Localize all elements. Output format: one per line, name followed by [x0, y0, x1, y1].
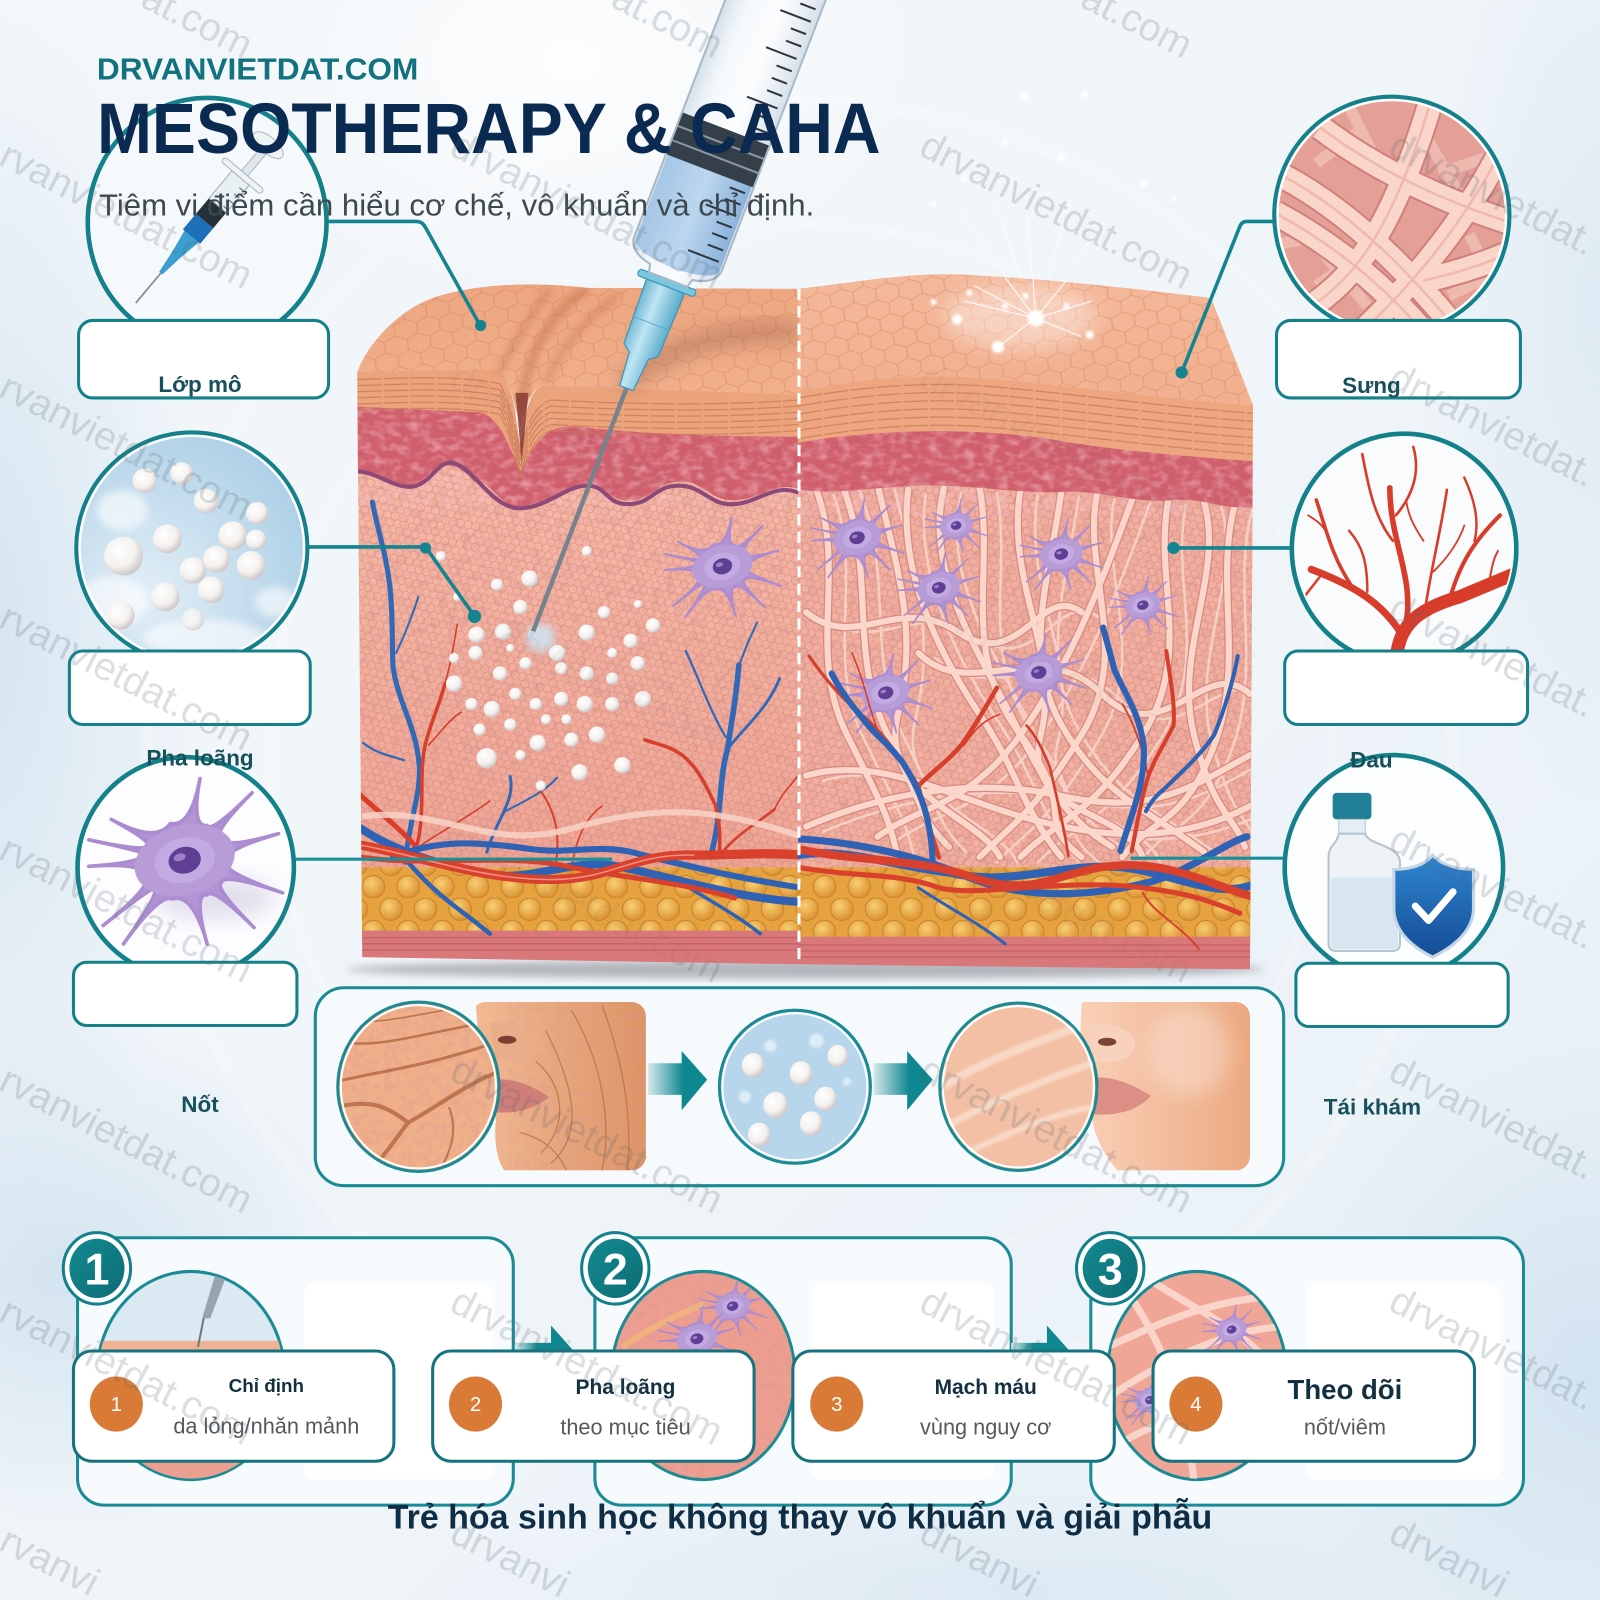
icon: collagen fibres — [1274, 97, 1510, 334]
text placeholder area — [304, 1284, 493, 1480]
wavy purple line — [357, 463, 801, 508]
watermark: drvanvietdat. — [1383, 355, 1600, 496]
watermark: drvanvietdat.com — [913, 585, 1200, 760]
arrow — [873, 1051, 933, 1110]
left half: aged skin with injection — [347, 274, 1267, 971]
watermark: rvanvietdat.com — [0, 827, 260, 992]
collagen fibers — [806, 485, 1267, 862]
icon: vial and shield — [1285, 755, 1503, 980]
watermark: rvanvietdat.com — [0, 1289, 260, 1454]
connector: nodule — [294, 858, 612, 861]
watermark: drvanvietdat.com — [913, 1279, 1200, 1454]
watermark: drvanvietdat. — [1383, 1047, 1600, 1189]
microsphere circle — [719, 1010, 870, 1163]
text placeholder area — [1306, 1284, 1500, 1480]
injection glow — [527, 623, 555, 652]
right vessels — [809, 628, 1238, 860]
step 2 badge: 2 — [603, 1244, 628, 1295]
icon: fibroblast cell — [78, 757, 294, 978]
arrow between step 2 and 3 — [1011, 1326, 1071, 1367]
plunger — [667, 113, 769, 187]
vessel bundle left — [359, 829, 801, 934]
fibroblasts right — [812, 499, 1177, 733]
wrinkled skin circle — [337, 1000, 500, 1173]
top surface — [357, 284, 801, 429]
lower collagen strands left — [362, 812, 801, 837]
label box — [69, 651, 310, 724]
watermark: drvanvietdat.com — [444, 355, 730, 529]
connector: swelling — [1176, 221, 1274, 379]
aged face — [476, 1002, 646, 1170]
card: monitoring: Theo dõi — [1288, 1374, 1402, 1405]
card: monitoring: 4 — [1190, 1394, 1202, 1416]
brand line: DRVANVIETDAT.COM — [97, 53, 418, 87]
watermark: drvanvietdat. — [1383, 123, 1600, 264]
card: dilution — [433, 1351, 754, 1461]
card: indication: 1 — [111, 1394, 122, 1416]
watermark: rvanvietdat.com — [0, 595, 260, 760]
step 3 badge: 3 — [1098, 1244, 1123, 1295]
watermark: drvanvietdat.com — [444, 1047, 730, 1222]
watermark: rvanvietdat.com — [0, 364, 260, 529]
watermark: drvanvietdat. — [1383, 817, 1600, 958]
barrel — [624, 0, 838, 296]
connector: follow-up — [1131, 857, 1285, 860]
panel: before and after — [315, 988, 1284, 1186]
liquid — [631, 155, 752, 284]
rejuvenated face — [1080, 1002, 1250, 1170]
card: vessels: Mạch máu — [935, 1376, 1037, 1399]
graduations — [688, 0, 816, 262]
panel: step 1 — [63, 1233, 513, 1505]
connector: dilution — [308, 542, 481, 623]
muscle layer right — [798, 937, 1257, 971]
step 1 badge — [63, 1233, 131, 1304]
icon: red vessel tree — [1292, 434, 1516, 664]
dermis right — [798, 480, 1257, 888]
step 1 badge: 1 — [84, 1244, 109, 1295]
label text: Lớp mô — [158, 372, 242, 397]
label text: Đau — [1350, 747, 1393, 772]
card: vessels: vùng nguy cơ — [920, 1415, 1051, 1440]
syringe shadow — [622, 331, 801, 386]
arrow between step 1 and 2 — [515, 1326, 576, 1367]
watermark: drvanvietdat.com — [444, 1279, 730, 1454]
red papillary band right — [798, 431, 1253, 508]
label text: Nốt — [181, 1092, 219, 1117]
watermark: drvanvietdat.com — [444, 123, 730, 298]
step 2 badge — [582, 1233, 649, 1304]
left vessels — [360, 502, 798, 867]
callout: pain — [1285, 434, 1528, 772]
callout: follow-up — [1285, 755, 1508, 1119]
card: monitoring — [1153, 1351, 1474, 1461]
panel: step 3 — [1077, 1233, 1523, 1505]
dispersed CaHA microspheres — [436, 546, 660, 791]
callout: dilution — [69, 433, 310, 770]
card: indication: da lỏng/nhăn mảnh — [173, 1414, 359, 1439]
card: dilution: Pha loãng — [576, 1376, 675, 1399]
step 1 illustration — [92, 1271, 296, 1484]
callout: swelling — [1274, 97, 1520, 398]
card: dilution: theo mục tiêu — [560, 1415, 691, 1440]
watermark: drvanvietdat.com — [444, 585, 730, 760]
wrinkle folds — [500, 288, 617, 408]
label box — [73, 962, 297, 1026]
watermark: drvanvietdat. — [1383, 1278, 1600, 1419]
label box — [1296, 963, 1508, 1027]
text placeholder area — [811, 1284, 995, 1480]
label text: Sưng — [1342, 373, 1401, 398]
card: monitoring: nốt/viêm — [1304, 1415, 1386, 1440]
card: indication — [73, 1351, 394, 1461]
watermark: drvanvietdat.com — [913, 1047, 1200, 1222]
icon: microspheres — [77, 433, 307, 663]
step 2 illustration — [607, 1270, 801, 1480]
label box — [1285, 651, 1528, 724]
card: vessels: 3 — [831, 1394, 842, 1416]
top surface right — [798, 274, 1253, 405]
watermark: drvanvietdat.com — [913, 123, 1200, 298]
connector: pain — [1167, 542, 1292, 554]
fat layer right — [798, 867, 1257, 941]
reticular band — [347, 403, 801, 507]
sparkles on skin — [931, 276, 1097, 353]
muscle layer left — [347, 931, 801, 965]
arrow — [648, 1051, 707, 1110]
closing statement: Trẻ hóa sinh học không thay vô khuẩn và giải phẫu — [388, 1497, 1212, 1537]
label text: Tái khám — [1324, 1094, 1421, 1119]
dermis — [347, 449, 801, 878]
watermark: drvanvietdat. — [1383, 585, 1600, 726]
subtitle: Tiêm vi điểm cần hiểu cơ chế, vô khuẩn và chỉ định. — [99, 189, 814, 222]
connector: tissue layer — [329, 221, 486, 331]
callout: nodule — [73, 757, 297, 1117]
block shadow — [347, 960, 1265, 979]
vessel bundle right — [798, 837, 1250, 949]
label box — [1277, 320, 1520, 398]
wrinkle groove — [515, 393, 529, 461]
label box — [79, 320, 329, 398]
callout: tissue layer — [79, 98, 329, 398]
watermark: rvanvietdat.com — [0, 133, 260, 298]
panel: step 2 — [582, 1233, 1011, 1505]
title: MESOTHERAPY & CAHA — [97, 89, 881, 169]
card: indication: Chỉ định — [229, 1375, 304, 1396]
smooth skin circle — [940, 1003, 1097, 1170]
needle hub — [607, 279, 685, 395]
watermark: drvanvietdat.com — [444, 817, 730, 992]
icon: large syringe — [486, 0, 838, 656]
fat layer left — [347, 867, 801, 933]
label text: Pha loãng — [146, 745, 254, 770]
watermark: drvanvietdat.com — [913, 817, 1200, 992]
needle — [529, 387, 629, 639]
skin cross-section block — [347, 274, 1267, 979]
card: vessels — [793, 1351, 1114, 1461]
epidermis front — [347, 369, 801, 471]
watermark: rvanvietdat.com — [0, 1057, 260, 1222]
step 3 illustration — [1107, 1271, 1291, 1480]
epidermis front right — [798, 376, 1253, 461]
step 3 badge — [1077, 1233, 1144, 1304]
dashed centre divider — [797, 289, 800, 964]
icon: small syringe — [88, 98, 327, 347]
fibroblast left — [665, 517, 781, 617]
watermark: drvanvietdat.com — [913, 355, 1200, 529]
card: dilution: 2 — [470, 1394, 481, 1416]
